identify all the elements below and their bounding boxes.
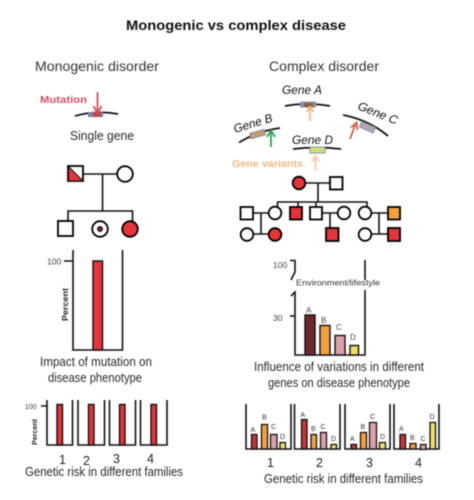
bar charts: genetic risk per family: 3 [366, 456, 373, 470]
bar charts: genetic risk per family: 1 [267, 456, 274, 470]
icon: gene B: Gene B [232, 111, 274, 136]
caption: genetic risk complex: Genetic risk in different families [264, 472, 423, 486]
icon: gene A [282, 83, 330, 121]
caption: influence of variations: Influence of variations in different [254, 360, 424, 374]
bar charts: genetic risk in four families: 100 [25, 404, 37, 411]
bar chart: influence of gene variations [273, 260, 381, 355]
bar chart: influence of gene variations: A [306, 306, 312, 315]
panel: monogenic disorder [25, 58, 183, 479]
label: gene variants: Gene variants [232, 159, 303, 170]
icon: mutation on single gene [40, 92, 118, 117]
bar charts: genetic risk per family: B [360, 424, 366, 431]
title: Monogenic vs complex disease [126, 18, 347, 33]
bar charts: genetic risk in four families [25, 400, 167, 468]
bar chart: impact of mutation: 100 [47, 256, 61, 266]
bar charts: genetic risk per family [246, 404, 439, 470]
bar charts: genetic risk per family: A [300, 412, 306, 419]
bar charts: genetic risk per family: D [331, 436, 336, 443]
bar charts: genetic risk in four families: 3 [113, 452, 120, 466]
bar chart: impact of mutation [47, 250, 122, 350]
bar chart: influence of gene variations: 30 [273, 313, 283, 323]
bar charts: genetic risk per family: B [410, 435, 415, 442]
label: single gene: Single gene [70, 129, 134, 143]
caption: impact of mutation [40, 355, 152, 385]
icon: gene B [232, 111, 280, 147]
bar chart: influence of gene variations: 100 [273, 260, 287, 270]
bar charts: genetic risk in four families: Percent [30, 419, 39, 445]
bar chart: influence of gene variations: C [336, 323, 342, 332]
bar charts: genetic risk per family: B [311, 426, 316, 433]
heading: monogenic disorder: Monogenic disorder [35, 58, 159, 74]
icon: mutation on single gene: Mutation [40, 95, 87, 106]
bar charts: genetic risk per family: B [262, 414, 267, 422]
heading: complex disorder: Complex disorder [269, 58, 379, 74]
bar chart: influence of gene variations: D [350, 333, 356, 342]
bar charts: genetic risk in four families: 4 [147, 452, 154, 466]
bar charts: genetic risk per family: D [430, 414, 435, 421]
bar chart: influence of gene variations: Environment/lifestyle [296, 278, 381, 288]
caption: influence of variations [254, 360, 424, 390]
bar charts: genetic risk per family: 4 [415, 456, 422, 470]
bar charts: genetic risk per family: A [399, 426, 404, 433]
icon: gene D: Gene D [292, 133, 333, 147]
pedigree: complex family [240, 177, 400, 241]
panel: complex disorder [232, 58, 439, 486]
caption: influence of variations: genes on disease phenotype [268, 376, 410, 390]
bar chart: influence of gene variations: B [321, 316, 326, 325]
bar charts: genetic risk per family: A [350, 436, 355, 443]
icon: gene D [292, 133, 341, 171]
caption: genetic risk monogenic: Genetic risk in different families [25, 465, 183, 479]
bar charts: genetic risk per family: 2 [316, 456, 323, 470]
bar charts: genetic risk per family: C [271, 424, 276, 431]
bar charts: genetic risk per family: D [380, 434, 385, 441]
icon: gene C: Gene C [356, 99, 400, 128]
bar charts: genetic risk per family: D [280, 434, 285, 441]
icon: gene A: Gene A [282, 83, 322, 97]
bar charts: genetic risk per family: C [420, 436, 426, 443]
bar charts: genetic risk per family: C [370, 414, 375, 421]
icon: gene C [343, 99, 400, 139]
caption: impact of mutation: disease phenotype [48, 371, 142, 385]
bar chart: impact of mutation: Percent [60, 288, 70, 321]
bar charts: genetic risk in four families: 2 [83, 454, 90, 468]
caption: impact of mutation: Impact of mutation on [40, 355, 152, 369]
bar charts: genetic risk per family: A [250, 427, 256, 434]
bar charts: genetic risk in four families: 1 [59, 453, 66, 467]
pedigree: monogenic family [58, 166, 138, 237]
bar charts: genetic risk per family: C [320, 424, 326, 431]
